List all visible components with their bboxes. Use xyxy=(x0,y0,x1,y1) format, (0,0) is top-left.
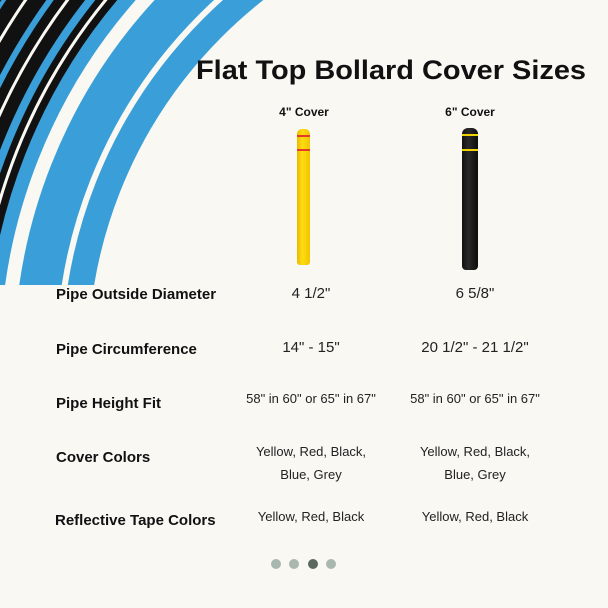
row: circumference: Pipe Circumference xyxy=(56,341,197,358)
row: outside diameter xyxy=(56,285,494,303)
row: circumference xyxy=(56,339,529,358)
row: cover colors: Cover Colors xyxy=(56,449,150,466)
row: outside diameter: 6 5/8" xyxy=(456,285,494,302)
row: cover colors xyxy=(56,444,530,482)
row: reflective tape colors: Yellow, Red, Black xyxy=(422,509,528,524)
icon: yellow bollard xyxy=(297,129,310,265)
row: reflective tape colors xyxy=(55,509,528,529)
row: reflective tape colors: Yellow, Red, Black xyxy=(258,509,364,524)
title: Flat Top Bollard Cover Sizes xyxy=(196,55,586,85)
decorative arcs xyxy=(0,0,264,285)
row: height fit: 58" in 60" or 65" in 67" xyxy=(246,391,376,406)
row: cover colors: Yellow, Red, Black, xyxy=(256,444,366,459)
row: cover colors: Blue, Grey xyxy=(280,467,342,482)
row: reflective tape colors: Reflective Tape Colors xyxy=(55,512,216,529)
icon: black bollard xyxy=(462,128,478,270)
row: cover colors: Blue, Grey xyxy=(444,467,506,482)
row: outside diameter: 4 1/2" xyxy=(292,285,330,302)
row: height fit: Pipe Height Fit xyxy=(56,395,161,412)
row: outside diameter: Pipe Outside Diameter xyxy=(56,286,216,303)
heading: 6" Cover: 6" Cover xyxy=(445,105,495,119)
row: cover colors: Yellow, Red, Black, xyxy=(420,444,530,459)
row: height fit xyxy=(56,391,540,412)
row: circumference: 14" - 15" xyxy=(282,339,340,356)
heading: 4" Cover: 4" Cover xyxy=(279,105,329,119)
row: circumference: 20 1/2" - 21 1/2" xyxy=(421,339,529,356)
pagination dots xyxy=(271,559,336,569)
row: height fit: 58" in 60" or 65" in 67" xyxy=(410,391,540,406)
